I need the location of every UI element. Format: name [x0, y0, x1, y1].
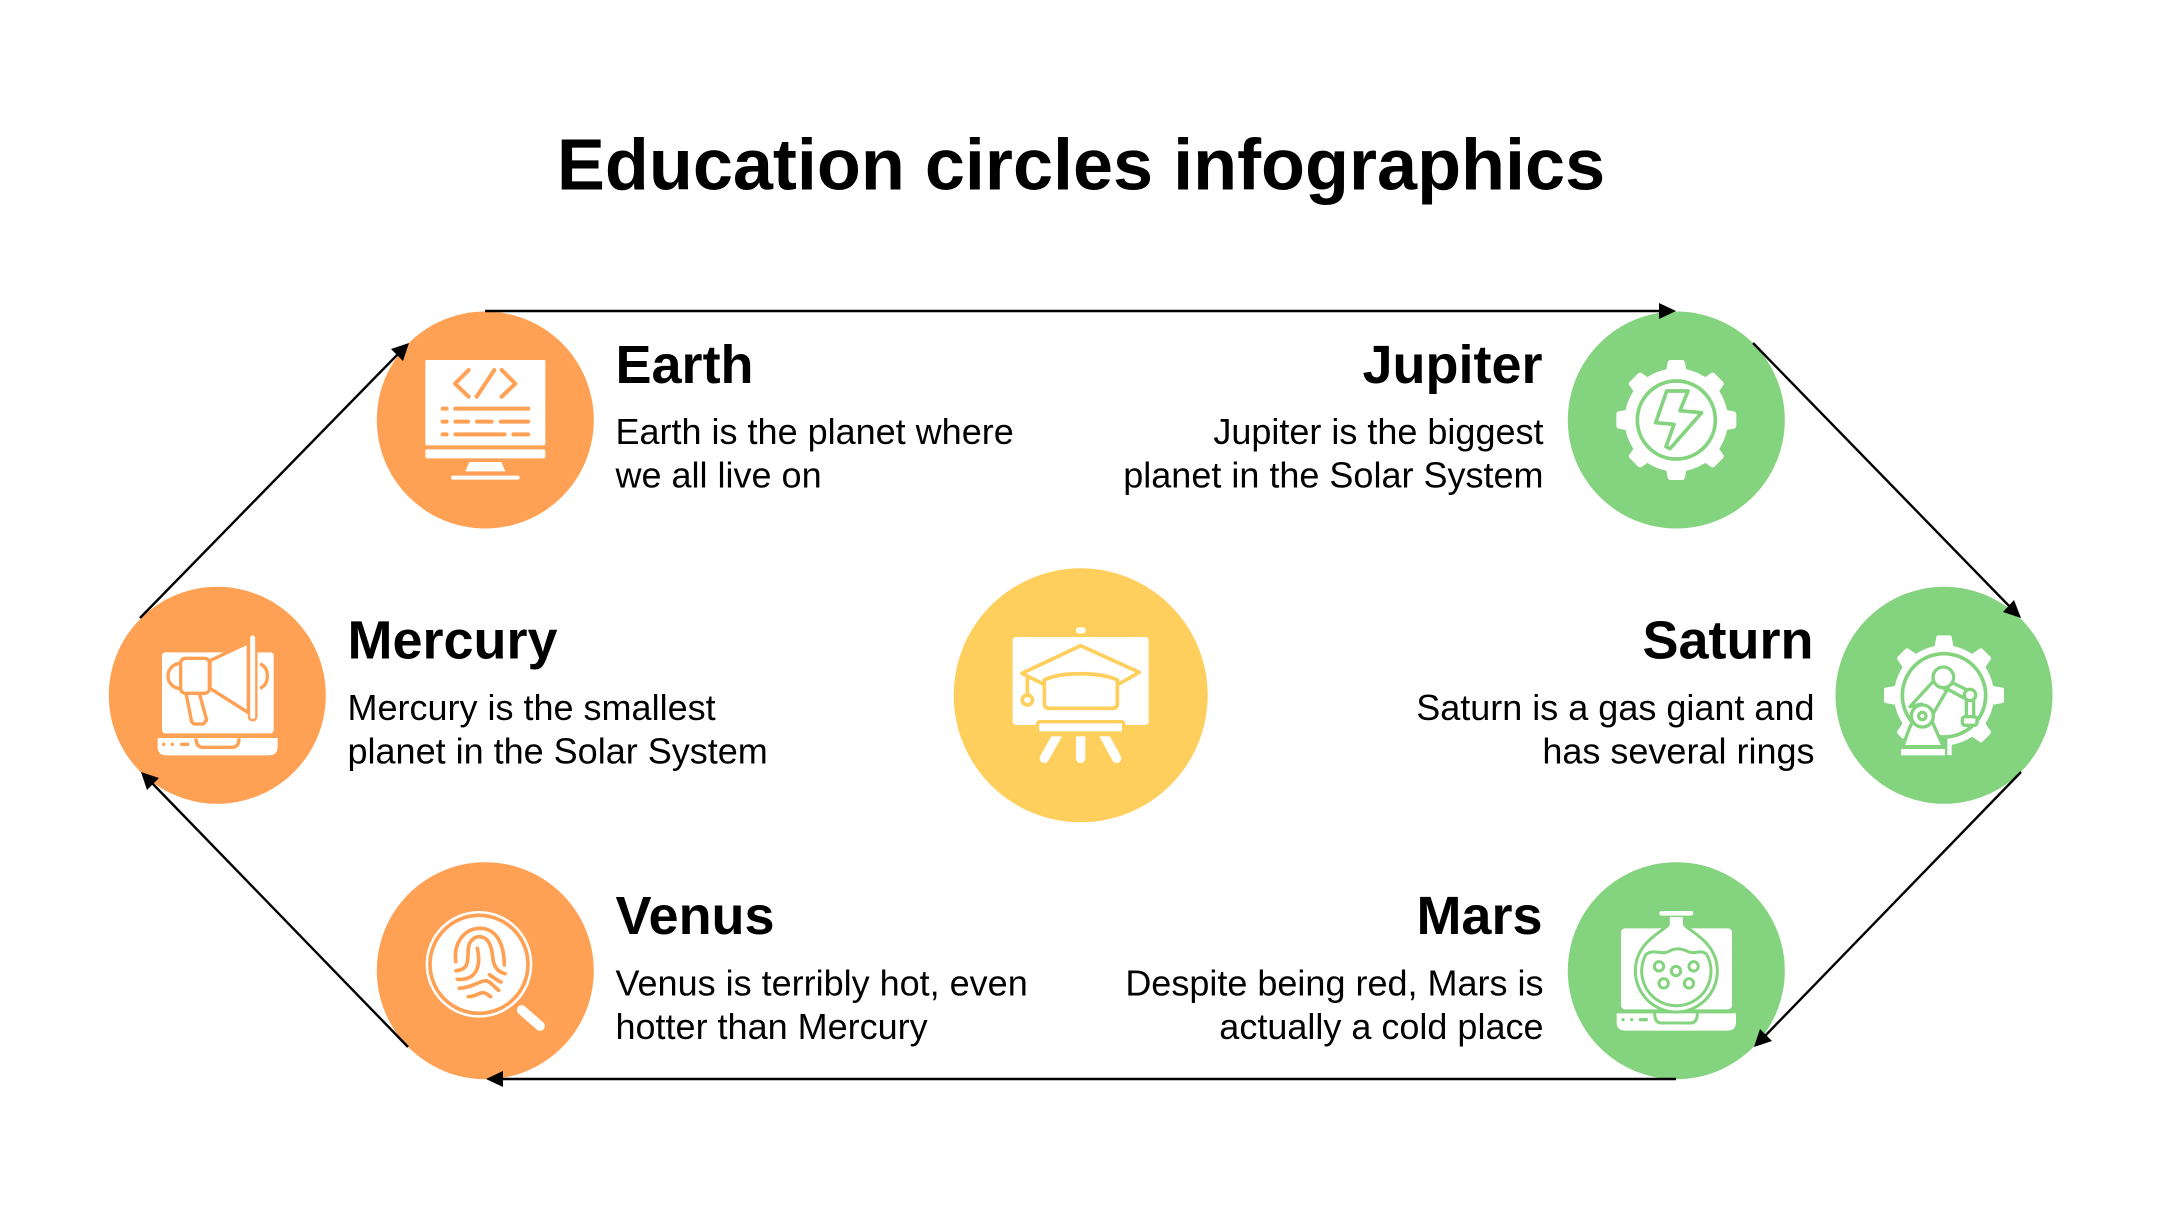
heading: Earth: Earth — [616, 335, 754, 395]
panel: centre circle — [954, 568, 1208, 822]
arrow: Mercury to Earth — [140, 343, 409, 618]
circle: Venus — [377, 862, 594, 1079]
circle: Earth — [377, 312, 594, 528]
panel: Saturn — [1416, 587, 2052, 804]
panel: Venus — [377, 862, 1028, 1079]
heading: Mercury: Mercury — [348, 610, 558, 670]
text: Mercury description: planet in the Solar System — [348, 730, 768, 771]
heading: Saturn: Saturn — [1642, 610, 1814, 670]
text: Venus description: hotter than Mercury — [616, 1006, 928, 1047]
panel: Earth — [377, 312, 1014, 528]
arrow: Saturn to Mars — [1754, 772, 2021, 1047]
icon: graduation cap on easel — [1013, 627, 1149, 758]
text: Mars description: actually a cold place — [1219, 1006, 1544, 1047]
arrow: Jupiter to Saturn — [1753, 343, 2021, 618]
text: Earth description: we all live on — [614, 454, 822, 496]
icon: fingerprint magnifier — [426, 911, 540, 1026]
icon: laptop megaphone — [158, 634, 278, 755]
heading: Jupiter: Jupiter — [1362, 335, 1542, 395]
text: Mercury description: Mercury is the smallest — [348, 687, 716, 728]
heading: Mars: Mars — [1416, 886, 1542, 946]
heading: Venus: Venus — [616, 886, 775, 946]
arrow: Mars to Venus — [486, 1071, 1676, 1087]
circle: Mars — [1568, 862, 1785, 1079]
circle: Saturn — [1836, 587, 2052, 804]
icon: code monitor — [425, 360, 545, 480]
panel: Mercury — [109, 587, 768, 804]
circle: Mercury — [109, 587, 326, 804]
panel: Mars — [1125, 862, 1785, 1079]
icon: gear with lightning bolt — [1616, 360, 1736, 480]
text: Earth description: Earth is the planet where — [616, 411, 1014, 452]
text: Jupiter description: Jupiter is the biggest — [1213, 411, 1544, 452]
arrow: Venus to Mercury — [141, 772, 408, 1047]
text: Mars description: Despite being red, Mars is — [1125, 962, 1544, 1004]
title: Education circles infographics — [557, 126, 1605, 206]
circle: centre — [954, 568, 1208, 822]
icon: laptop flask — [1617, 911, 1736, 1031]
text: Venus description: Venus is terribly hot, even — [616, 962, 1028, 1004]
text: Saturn description: Saturn is a gas giant and — [1416, 687, 1814, 728]
arrow: Earth to Jupiter — [485, 303, 1676, 319]
panel: Jupiter — [1123, 312, 1785, 528]
text: Saturn description: has several rings — [1542, 730, 1814, 771]
text: Jupiter description: planet in the Solar System — [1123, 454, 1544, 496]
circle: Jupiter — [1568, 312, 1785, 528]
icon: gear with robot arm — [1884, 635, 2004, 758]
